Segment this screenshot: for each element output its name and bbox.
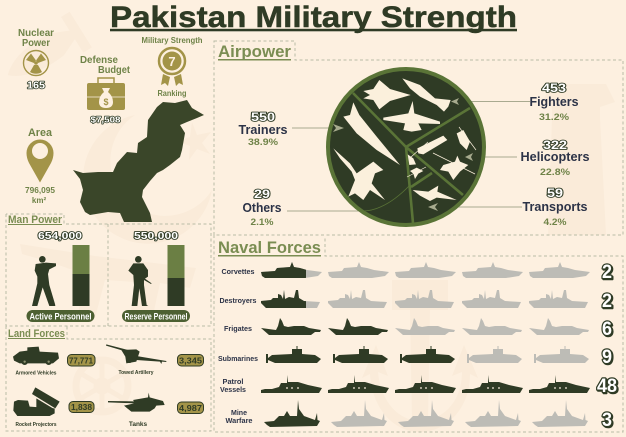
- pill: reserve personnel: Reserve Personnel: [124, 312, 188, 322]
- label: helicopters: 322: [543, 140, 567, 152]
- label: trainers: Trainers: [238, 122, 288, 137]
- icon: map pin: [26, 140, 54, 182]
- stat: area: km²: [32, 196, 46, 205]
- row: mine warfare: Mine: [231, 408, 247, 417]
- row: patrol vessels: 48: [597, 376, 617, 397]
- bar: reserve personnel: [168, 245, 184, 306]
- pill: rocket projectors: 1,838: [71, 402, 92, 412]
- others leader curve: [362, 185, 410, 211]
- label: transports: [522, 188, 588, 228]
- stat: nuclear power: [18, 27, 54, 92]
- panel: land forces: Rocket Projectors: [16, 422, 56, 428]
- heading: land forces: Land Forces: [8, 328, 65, 340]
- stat: defense budget: Defense: [80, 54, 118, 66]
- icon: towed artillery: [106, 344, 166, 364]
- stat: nuclear power: 165: [27, 80, 45, 92]
- row: mine warfare: 3: [602, 410, 612, 431]
- label: transports: 59: [547, 188, 563, 200]
- pill: towed artillery: 3,345: [179, 356, 202, 366]
- row: destroyers: Destroyers: [220, 296, 256, 305]
- pie dividers: [353, 93, 470, 223]
- icon: tank: [108, 393, 165, 412]
- watermark: watchtower: [542, 84, 615, 235]
- stat: area: Area: [28, 127, 53, 139]
- panel: land forces: Towed Artillery: [118, 370, 154, 376]
- row: submarines: [218, 346, 612, 368]
- stat: military ranking: [142, 36, 203, 98]
- row: corvettes: [222, 262, 614, 280]
- label: fighters: Fighters: [530, 94, 578, 109]
- panel: man power: 654,000: [38, 230, 82, 242]
- row: destroyers: 2: [602, 291, 612, 312]
- watermark: bomb: [0, 12, 92, 93]
- label: transports: 4.2%: [544, 217, 567, 228]
- label: others: 2.1%: [250, 217, 274, 228]
- row: mine warfare: [226, 400, 612, 431]
- pill: active personnel: Active Personnel: [30, 312, 92, 322]
- row: mine warfare: Warfare: [226, 416, 252, 425]
- label: trainers: 550: [251, 112, 275, 124]
- label: others: [242, 189, 282, 228]
- row: submarines: Submarines: [218, 354, 258, 363]
- icon: rocket projector: [13, 387, 60, 416]
- label: others: 29: [254, 189, 270, 201]
- map of Pakistan: [73, 100, 204, 222]
- label: helicopters: 22.8%: [540, 167, 571, 178]
- label: others: Others: [242, 200, 282, 215]
- icon: armored vehicle: [13, 347, 59, 365]
- label: fighters: 453: [542, 83, 566, 95]
- stat: military ranking: Ranking: [158, 89, 187, 98]
- panel: man power: [6, 214, 211, 326]
- stat: military ranking: Military Strength: [142, 36, 203, 45]
- soldier: reserve: [128, 256, 152, 306]
- panel: naval forces: [214, 235, 623, 432]
- pie chart: aircraft: [328, 69, 484, 225]
- label: transports: Transports: [522, 199, 588, 214]
- stat: area: [25, 127, 56, 205]
- stat: nuclear power: Nuclear: [18, 27, 54, 39]
- row: corvettes: 2: [602, 262, 612, 283]
- label: trainers: 38.9%: [248, 137, 279, 148]
- bar: active personnel: [72, 245, 90, 306]
- row: frigates: [224, 318, 612, 340]
- panel: airpower: [214, 41, 623, 235]
- stat: defense budget: [80, 54, 130, 124]
- aircraft silhouettes: [333, 78, 470, 201]
- heading: airpower: Airpower: [218, 42, 291, 61]
- stat: nuclear power: Power: [22, 37, 50, 49]
- icon: medal: 7: [168, 54, 176, 69]
- row: patrol vessels: Patrol: [222, 377, 244, 386]
- heading: man power: Man Power: [8, 214, 63, 226]
- soldier: active: [32, 256, 56, 306]
- label: fighters: 31.2%: [539, 112, 570, 123]
- stat: defense budget: $7,508: [90, 114, 121, 124]
- pill: tanks: 4,987: [179, 403, 202, 413]
- watermark: wheel: [76, 360, 128, 412]
- panel: land forces: Armored Vehicles: [16, 370, 56, 376]
- row: corvettes: Corvettes: [222, 267, 254, 276]
- label: helicopters: [520, 140, 590, 178]
- label: trainers: [238, 112, 288, 148]
- panel: land forces: [6, 326, 211, 431]
- row: patrol vessels: [220, 375, 617, 397]
- icon: radiation: [24, 50, 48, 76]
- rotor lines: [407, 127, 476, 177]
- stat: defense budget: Budget: [98, 64, 130, 76]
- label: fighters: [530, 83, 578, 123]
- label: helicopters: Helicopters: [520, 149, 590, 164]
- stat: area: 796,095: [25, 186, 56, 195]
- row: frigates: Frigates: [224, 324, 252, 333]
- panel: land forces: Tanks: [129, 421, 148, 428]
- icon: briefcase: $: [103, 97, 109, 107]
- row: patrol vessels: Vessels: [220, 385, 246, 394]
- pill: armored vehicles: 77,771: [69, 356, 93, 366]
- leader arrows: [333, 98, 473, 211]
- watermark: rifle: [20, 244, 196, 320]
- leader lines: [287, 102, 530, 211]
- watermark: crescent and star: [83, 115, 212, 244]
- watermark: anchor: [362, 280, 478, 432]
- panel: man power: 550,000: [134, 230, 178, 242]
- pill: reserve personnel: [122, 310, 190, 322]
- heading: naval forces: Naval Forces: [218, 238, 321, 257]
- row: submarines: 9: [602, 347, 612, 368]
- row: frigates: 6: [602, 319, 612, 340]
- title: Pakistan Military Strength: [110, 1, 517, 34]
- row: destroyers: [220, 290, 614, 310]
